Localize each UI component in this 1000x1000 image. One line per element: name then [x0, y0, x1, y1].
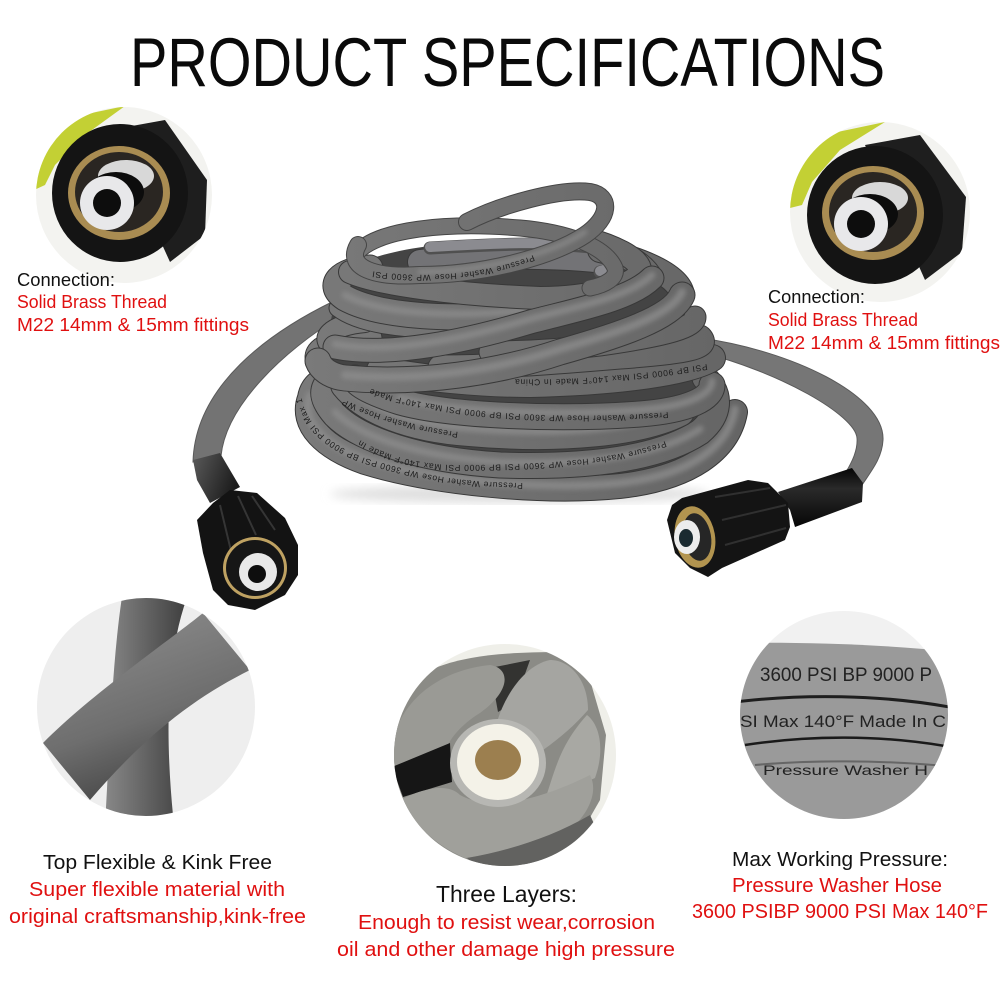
back strands [420, 243, 617, 272]
top loop [355, 191, 605, 276]
photo: crossed hoses [37, 598, 255, 816]
nut [197, 490, 298, 610]
label: left connection: M22 14mm & 15mm fittings [17, 315, 249, 335]
photo: left brass connection [36, 107, 212, 283]
ferrule [193, 453, 240, 503]
base hoses [390, 652, 606, 870]
crossing band lower [318, 292, 682, 380]
black shadow [392, 743, 452, 797]
label: left connection [17, 270, 249, 335]
coiled hose product photo [193, 191, 883, 503]
brass ring [223, 537, 287, 599]
left hook of crossing bands [317, 322, 370, 361]
label: right connection: M22 14mm & 15mm fittings [768, 333, 1000, 353]
hose printing: PSI BP 9000 PSI Max 140°F Made In China [515, 364, 708, 386]
label: right connection [768, 287, 1000, 353]
label: pressure: Pressure Washer Hose [732, 875, 942, 897]
photo: hose print closeup: Pressure Washer H [763, 762, 928, 778]
cut end [450, 719, 546, 807]
label: right connection: Connection: [768, 287, 865, 307]
middle band [345, 381, 680, 435]
photo: hose print closeup: 3600 PSI BP 9000 P [760, 665, 932, 686]
coil body backing [309, 242, 722, 490]
label: left connection: Connection: [17, 270, 115, 290]
second loop [355, 226, 615, 288]
label: flexibility: original craftsmanship,kink-free [9, 906, 306, 928]
label: layers [337, 881, 675, 961]
outer band [308, 376, 735, 489]
label: left connection: Solid Brass Thread [17, 292, 167, 312]
right stacked bands [440, 317, 702, 367]
label: layers: oil and other damage high pressure [337, 939, 675, 961]
photo: hose print closeup [740, 611, 948, 819]
label: pressure: Max Working Pressure: [732, 849, 948, 871]
hose printing: Pressure Washer Hose WP 3600 PSI BP 9000 PSI Max 140°F Made In China [370, 389, 668, 422]
label: flexibility: Super flexible material with [29, 879, 285, 901]
upper narrow band [350, 240, 640, 298]
upper wide band [336, 268, 560, 317]
label: layers: Enough to resist wear,corrosion [358, 912, 655, 934]
photo: right brass connection [790, 122, 970, 302]
silver tip [239, 553, 277, 591]
right fitting [667, 468, 863, 577]
label: pressure: 3600 PSIBP 9000 PSI Max 140°F [692, 901, 988, 923]
hose printing: Pressure Washer Hose WP 3600 PSI [372, 255, 535, 281]
silver tip [674, 520, 700, 554]
nut [667, 480, 790, 577]
back arcs of upper loops [590, 240, 682, 295]
back hose [392, 665, 505, 770]
front tube [497, 660, 588, 750]
bottom coil [467, 815, 596, 870]
grip [778, 468, 863, 527]
printed band upper [380, 358, 712, 384]
label: flexibility [9, 852, 306, 928]
label: pressure [692, 849, 988, 923]
hose printing: Pressure Washer Hose WP 3600 PSI [342, 401, 458, 438]
photo: hose print closeup: SI Max 140°F Made In C [740, 712, 946, 731]
label: flexibility: Top Flexible & Kink Free [43, 852, 272, 874]
printed band [355, 378, 712, 417]
dark gap [496, 660, 530, 712]
inner band [324, 378, 716, 466]
hose printing: Pressure Washer Hose WP 3600 PSI BP 9000 PSI Max 140°F Made In China [359, 440, 666, 471]
brass ring [670, 503, 720, 571]
left fitting [193, 453, 298, 610]
hose printing: Pressure Washer Hose WP 3600 PSI BP 9000 PSI Max 140°F Made In China [296, 398, 522, 489]
photo: hose cross section [390, 640, 620, 870]
crossing band upper [335, 275, 652, 350]
left hose tail [193, 301, 338, 462]
label: layers: Three Layers: [436, 881, 577, 907]
hose printing [296, 255, 708, 489]
right hose tail [700, 338, 883, 485]
lower coil [400, 775, 593, 858]
under band [338, 308, 440, 328]
label: right connection: Solid Brass Thread [768, 310, 918, 330]
soft shadow [330, 485, 710, 503]
right coil [547, 715, 600, 793]
